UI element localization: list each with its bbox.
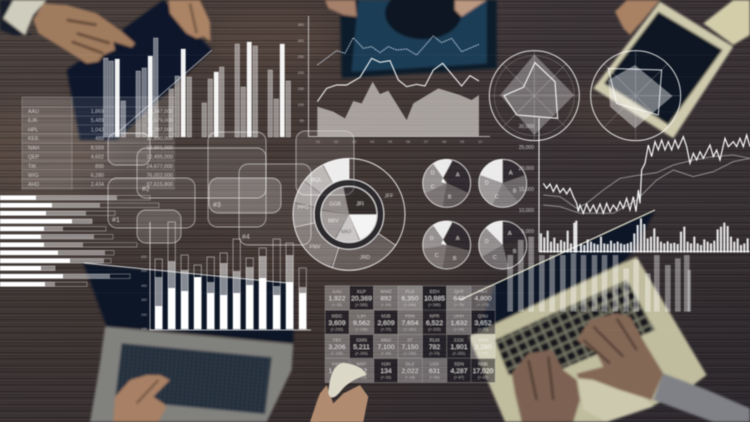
line and area chart: top centre xyxy=(298,16,490,144)
pie chart: A-D top-left xyxy=(423,159,471,207)
KPI tile grid: (+.35) xyxy=(332,303,343,307)
KPI tile grid: (+.87) xyxy=(454,376,465,380)
KPI tile grid: WEF xyxy=(356,362,367,366)
KPI tile grid: 640 xyxy=(453,296,465,302)
stock chart axis labels: 30,000 xyxy=(519,124,534,130)
inner pie segments xyxy=(335,200,363,228)
KPI tile grid: YBY xyxy=(332,338,342,342)
line and area chart: top centre: 06 xyxy=(406,140,410,144)
data table: stock list: QEP xyxy=(28,154,40,160)
horizontal stacked bars xyxy=(0,196,159,286)
data table: stock list: HPL xyxy=(28,128,38,134)
data table: stock list: 12,890,000 xyxy=(146,136,173,142)
KPI tile grid: KKM xyxy=(332,362,342,366)
box 3 xyxy=(108,178,195,228)
data table: stock list: 489 xyxy=(95,136,104,142)
data table: stock list: TIK xyxy=(28,164,37,170)
KPI tile grid: (+.40) xyxy=(381,352,392,356)
line and area chart: top centre: 01 xyxy=(316,140,320,144)
KPI tile grid: SDN xyxy=(454,362,464,366)
donut labels: BBV xyxy=(328,218,339,224)
KPI tile grid: GMN xyxy=(356,338,367,342)
pie chart: A-D top-left: D xyxy=(431,170,435,176)
box labels xyxy=(112,186,250,241)
KPI tile grid: (+.122) xyxy=(428,328,441,332)
donut chart: large multi-ring xyxy=(293,158,405,270)
stacked bar chart: bottom centre: 600 xyxy=(141,255,147,259)
data table: stock list: 13,579,000 xyxy=(146,118,173,124)
box 8 xyxy=(296,131,354,195)
KPI tile grid: 134 xyxy=(380,368,392,375)
KPI tile grid: 3,280 xyxy=(474,344,492,351)
KPI tile grid: (+.94) xyxy=(454,328,465,332)
KPI tile grid xyxy=(325,286,495,383)
KPI tile grid: (+.18) xyxy=(405,376,416,380)
photo: bottom-left laptop and hands xyxy=(83,263,320,422)
KPI tile grid: (+.215) xyxy=(331,328,344,332)
line and area chart: top centre: 04 xyxy=(370,140,374,144)
line and area chart: top centre: 07 xyxy=(424,140,428,144)
line and area chart: top centre: 50 xyxy=(300,119,304,123)
box labels: #4 xyxy=(242,234,250,241)
KPI tile grid: HKY xyxy=(478,289,488,294)
data table: stock list: 1,869 xyxy=(91,109,104,115)
KPI tile grid: LED xyxy=(430,362,440,366)
data table: stock list: 1,042 xyxy=(91,128,104,134)
KPI tile grid: NPR xyxy=(430,314,440,318)
KPI tile grid: 6,350 xyxy=(401,296,419,302)
white line series xyxy=(317,58,479,102)
data table: stock list xyxy=(22,97,175,190)
KPI tile grid: HJH xyxy=(382,362,390,366)
KPI tile grid: (+.175) xyxy=(477,303,490,307)
KPI tile grid: NHK xyxy=(478,362,489,366)
line: laptop screen edge highlight xyxy=(84,263,288,283)
KPI tile grid: 4,287 xyxy=(450,368,468,375)
KPI tile grid: (+.68) xyxy=(429,376,440,380)
donut labels: MKF xyxy=(341,229,353,235)
pie chart: A-D bottom-right: C xyxy=(493,255,497,261)
stacked bar chart: bottom centre: 500 xyxy=(141,269,147,273)
data table: stock list: 6,280 xyxy=(91,173,104,179)
KPI tile grid: (+.154) xyxy=(355,352,368,356)
photo: top-left tablet and hands xyxy=(0,0,212,140)
donut labels: JRD xyxy=(360,255,370,261)
dividers xyxy=(295,158,396,267)
pie chart: A-D bottom-right: B xyxy=(513,249,517,255)
line and area chart: top centre: 100 xyxy=(298,103,304,107)
stacked bar chart: bottom centre xyxy=(141,222,311,331)
KPI tile grid: 412 xyxy=(356,368,367,375)
KPI tile grid: 2,022 xyxy=(401,368,419,375)
data table: stock list: 13,901,000 xyxy=(146,146,173,152)
KPI tile grid: WWZ xyxy=(380,289,392,294)
data table: stock list: 12,495,000 xyxy=(146,154,173,160)
dark separator ring xyxy=(317,183,381,246)
stock chart axes xyxy=(539,118,750,252)
scan lines overlay xyxy=(0,55,750,330)
KPI tile grid: MJB xyxy=(381,314,391,318)
KPI tile grid: LJH xyxy=(357,314,366,318)
stock chart: price line, averages and volume xyxy=(519,118,750,253)
pie chart: A-D bottom-left: B xyxy=(453,256,457,262)
KPI tile grid: IIT xyxy=(407,338,413,342)
photo: top-right tablet, hand and sleeve xyxy=(593,0,750,138)
stacked bar chart: bottom centre: 300 xyxy=(141,298,147,302)
KPI tile grid: (+.90) xyxy=(478,352,489,356)
box labels: #1 xyxy=(112,217,120,224)
KPI tile grid: (+.060) xyxy=(404,303,417,307)
pie chart: A-D top-right: D xyxy=(485,180,489,186)
line: tablet edge highlight xyxy=(116,50,212,134)
pie chart: A-D top-left: B xyxy=(448,194,452,200)
KPI tile grid: (+.70) xyxy=(478,328,489,332)
KPI tile grid: 1,632 xyxy=(450,320,468,327)
rounded translucent data boxes xyxy=(108,131,354,245)
pie chart: A-D top-left: A xyxy=(456,172,460,178)
KPI tile grid: 782 xyxy=(429,344,440,351)
stock chart axis labels: 25,000 xyxy=(519,145,534,151)
KPI tile grid: RLM xyxy=(430,338,440,342)
pie chart: A-D bottom-left xyxy=(423,221,471,269)
data table: stock list: EJK xyxy=(28,118,38,124)
pie chart: A-D top-right: A xyxy=(509,170,513,176)
line and area chart: top centre: 150 xyxy=(298,87,304,91)
data table: stock list: 76,002,000 xyxy=(146,173,173,179)
pie chart: A-D bottom-right xyxy=(479,221,527,269)
KPI tile grid: (+.585) xyxy=(355,303,368,307)
KPI tile grid: 7,100 xyxy=(377,344,395,351)
line and area chart: top centre: 10 xyxy=(478,140,482,144)
KPI tile grid: (+.151) xyxy=(453,352,466,356)
KPI tile grid: 9,562 xyxy=(353,320,370,327)
bar chart: top-left grouped bars xyxy=(104,38,290,137)
KPI tile grid: QHT xyxy=(454,289,464,294)
moving averages xyxy=(543,155,750,208)
KPI tile grid: MMJ xyxy=(381,338,391,342)
photo: bottom-right laptop, hands and sleeve xyxy=(468,210,750,422)
pie chart: A-D top-left: C xyxy=(431,184,435,190)
donut labels: PPG xyxy=(298,205,309,211)
KPI tile grid: QNU xyxy=(478,314,488,318)
data table: stock list: 97,615,800 xyxy=(146,182,173,188)
KPI tile grid: (+.74) xyxy=(429,352,440,356)
KPI tile grid: JHW xyxy=(478,338,489,342)
pie chart: A-D top-right xyxy=(479,159,527,207)
data table: stock list: WIG xyxy=(28,173,39,179)
line and area chart: top centre: 200 xyxy=(298,71,304,75)
KPI tile grid: (+.16) xyxy=(381,376,392,380)
data table: stock list: 8,569 xyxy=(91,146,104,152)
data table: stock list: 12,297,000 xyxy=(146,128,173,134)
stock chart axis labels xyxy=(519,124,534,235)
KPI tile grid: (+.161) xyxy=(404,328,417,332)
KPI tile grid: AAU xyxy=(332,289,342,294)
dashed line series xyxy=(317,36,479,65)
KPI tile grid: 3,609 xyxy=(328,320,346,327)
KPI tile grid: MDC xyxy=(332,314,343,318)
donut labels: JFI xyxy=(356,202,364,208)
stock chart axis labels: 5,000 xyxy=(521,229,534,235)
box labels: #3 xyxy=(213,202,221,209)
pie chart: A-D top-right: C xyxy=(495,194,499,200)
KPI tile grid: 17,020 xyxy=(473,368,494,375)
pie chart: A-D bottom-left: D xyxy=(430,236,434,242)
box 6 xyxy=(209,178,281,213)
box labels: #2 xyxy=(142,186,150,193)
KPI tile grid: (+.30) xyxy=(381,303,392,307)
KPI tile grid: 2,609 xyxy=(377,320,395,327)
stacked bar chart: bottom centre: 200 xyxy=(141,313,147,317)
pie chart: A-D bottom-right: D xyxy=(485,239,489,245)
KPI tile grid: UHH xyxy=(454,314,464,318)
line and area chart: top centre: 02 xyxy=(334,140,338,144)
data table: stock list: 2,434 xyxy=(91,182,104,188)
line and area chart: top centre: 09 xyxy=(460,140,464,144)
donut labels: GGB xyxy=(329,202,341,208)
data table: stock list: 890 xyxy=(95,164,104,170)
KPI tile grid: 1,901 xyxy=(450,344,468,351)
KPI tile grid: (+.42) xyxy=(478,376,489,380)
data table: stock list: AAU xyxy=(28,109,39,115)
donut labels: JFF xyxy=(384,194,394,200)
line: laptop screen top edge highlight xyxy=(460,210,655,300)
stacked bar chart: bottom centre: 100 xyxy=(141,327,147,331)
data table: stock list: 4,602 xyxy=(91,154,104,160)
box 7 xyxy=(239,164,311,245)
KPI tile grid: 7,654 xyxy=(401,320,419,327)
KPI tile grid: DLZ xyxy=(406,362,415,366)
radar chart: left xyxy=(489,51,579,141)
outer ring segments xyxy=(303,169,394,260)
KPI tile grid: PLD xyxy=(406,289,415,294)
KPI tile grid: (+.150) xyxy=(404,352,417,356)
volume spikes xyxy=(541,218,748,253)
box 2 xyxy=(137,148,266,198)
KPI tile grid: 631 xyxy=(429,368,440,375)
data table: stock list: KEE xyxy=(28,136,39,142)
line and area chart: top centre: 250 xyxy=(298,55,304,59)
stacked bar chart: bottom centre: 400 xyxy=(141,284,147,288)
KPI tile grid: (+.585) xyxy=(428,303,441,307)
line and area chart: top centre: 08 xyxy=(442,140,446,144)
box 1 xyxy=(108,133,150,165)
photo: mouse and hand over the KPI grid xyxy=(310,363,368,422)
ring outlines xyxy=(293,158,405,270)
KPI tile grid: 7,150 xyxy=(401,344,419,351)
KPI tile grid: 10,985 xyxy=(424,296,445,302)
KPI tile grid: 20,369 xyxy=(351,296,372,302)
donut labels: BQL xyxy=(311,178,322,184)
data table: stock list: 24,677,000 xyxy=(146,164,173,170)
photo: top-centre tablet and hands xyxy=(325,0,497,78)
KPI tile grid: (+.12) xyxy=(356,376,367,380)
line and area chart: top centre: 300 xyxy=(298,39,304,43)
KPI tile grid: 1,212 xyxy=(328,368,346,375)
KPI tile grid: 1,922 xyxy=(328,296,346,302)
radar chart: right xyxy=(591,51,681,141)
KPI tile grid: (+.62) xyxy=(332,376,343,380)
KPI tile grid: CCK xyxy=(454,338,465,342)
data table: stock list: AHD xyxy=(28,182,39,188)
stock chart axis labels: 10,000 xyxy=(519,208,534,214)
KPI tile grid: PDN xyxy=(405,314,415,318)
data table: stock list: 13,347,000 xyxy=(146,109,173,115)
KPI tile grid: 4,800 xyxy=(474,296,492,302)
stock chart axis labels: 20,000 xyxy=(519,166,534,172)
bar chart: translucent bars over right laptop xyxy=(507,237,691,312)
KPI tile grid: (+.70) xyxy=(381,328,392,332)
donut labels: FNV xyxy=(310,244,321,250)
line and area chart: top centre: 03 xyxy=(352,140,356,144)
KPI tile grid: 5,211 xyxy=(353,344,370,351)
box 4 xyxy=(137,210,181,243)
line and area chart: top centre: 05 xyxy=(388,140,392,144)
KPI tile grid: 6,522 xyxy=(426,320,443,327)
pie chart: A-D bottom-left: A xyxy=(456,236,460,242)
data table: stock list: 5,489 xyxy=(91,118,104,124)
box 5 xyxy=(208,132,266,227)
line and area chart: top centre: 350 xyxy=(298,23,304,27)
KPI tile grid: (+.136) xyxy=(355,328,368,332)
KPI tile grid: (+.105) xyxy=(331,352,344,356)
KPI tile grid: 3,206 xyxy=(328,344,346,351)
KPI tile grid: KLP xyxy=(357,289,366,294)
KPI tile grid: (+.75) xyxy=(454,303,465,307)
stock chart axis labels: 15,000 xyxy=(519,187,534,193)
pie chart: A-D bottom-left: C xyxy=(435,253,439,259)
area series xyxy=(317,82,479,136)
KPI tile grid: 3,652 xyxy=(474,320,492,327)
donut labels xyxy=(298,178,394,261)
KPI tile grid: EEH xyxy=(430,289,439,294)
pie chart: A-D top-right: B xyxy=(513,188,517,194)
price line xyxy=(543,135,750,213)
pie chart: A-D bottom-right: A xyxy=(508,231,512,237)
KPI tile grid: 892 xyxy=(380,296,392,302)
data table: stock list: NAH xyxy=(28,146,39,152)
